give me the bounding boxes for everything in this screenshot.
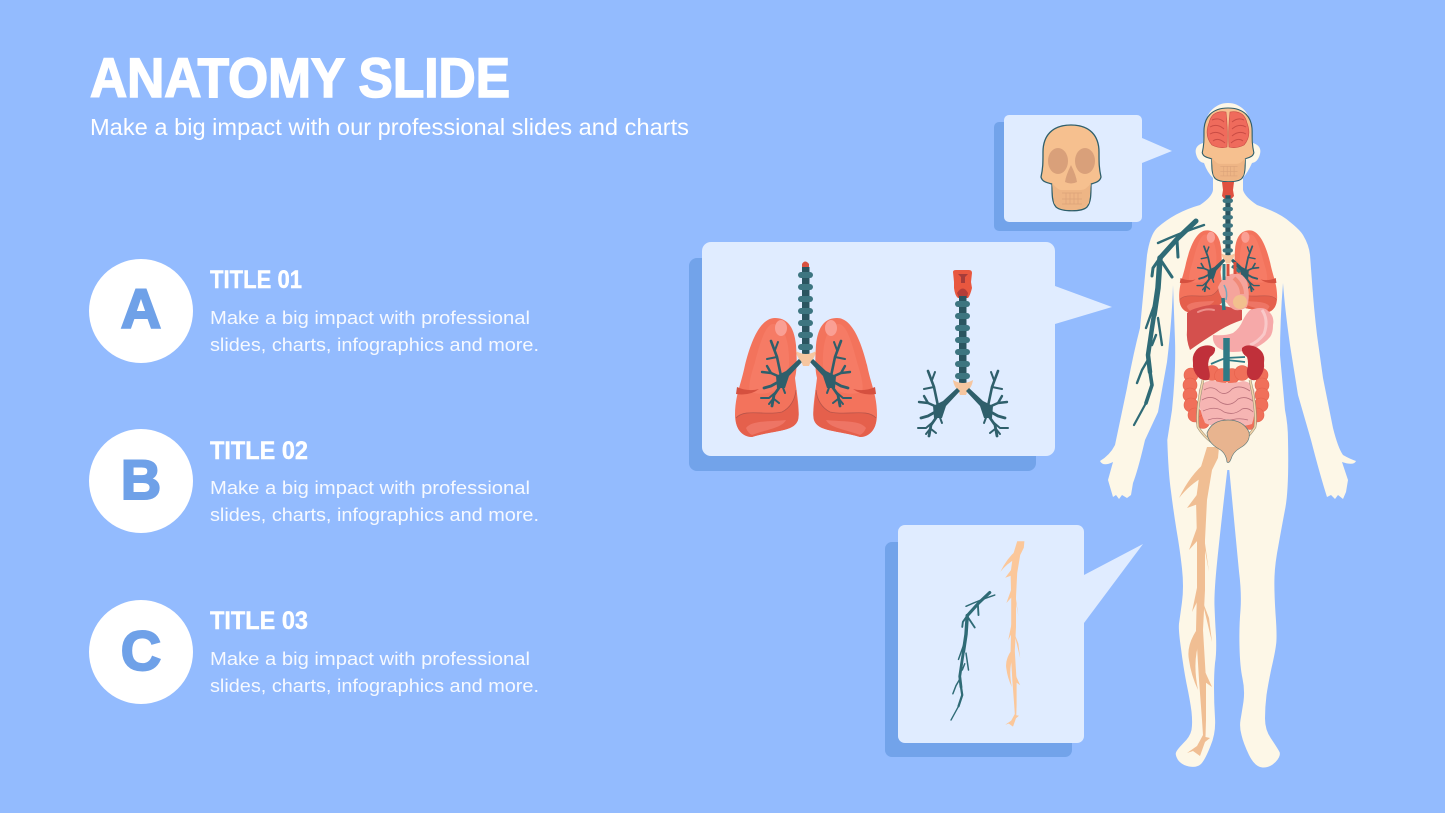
title: ANATOMY SLIDE — [90, 46, 510, 109]
description C: Make a big impact with professional — [210, 649, 530, 669]
lungs and trachea — [1179, 195, 1277, 313]
badge C: C — [121, 619, 161, 682]
icon: vein — [951, 593, 995, 720]
heading title 02: TITLE 02 — [210, 437, 308, 465]
kidneys — [1193, 345, 1264, 380]
heart — [1218, 262, 1249, 310]
icon: trachea and bronchi — [918, 270, 1008, 436]
heading title 01: TITLE 01 — [210, 266, 302, 294]
panel: vessels callout — [885, 525, 1143, 757]
panel: skull callout — [994, 115, 1172, 231]
larynx — [1222, 182, 1234, 200]
large intestine — [1183, 366, 1269, 430]
icon: nerve — [1000, 541, 1024, 727]
subtitle: Make a big impact with our professional slides and charts — [90, 114, 689, 140]
badge B — [89, 429, 193, 533]
leg nerve — [1179, 447, 1219, 756]
description C: slides, charts, infographics and more. — [210, 676, 539, 696]
item B — [89, 429, 539, 533]
description B: slides, charts, infographics and more. — [210, 505, 539, 525]
liver — [1187, 305, 1242, 350]
body skull — [1202, 108, 1254, 182]
item A — [89, 259, 539, 363]
stomach — [1213, 308, 1273, 352]
badge C — [89, 600, 193, 704]
bladder — [1207, 420, 1249, 463]
heading title 03: TITLE 03 — [210, 607, 308, 635]
body silhouette — [1100, 103, 1356, 768]
badge A — [89, 259, 193, 363]
badge B: B — [121, 448, 161, 511]
description A — [210, 308, 539, 355]
description B: Make a big impact with professional — [210, 478, 530, 498]
icon: skull — [1041, 125, 1101, 211]
badge A: A — [121, 277, 161, 340]
blood vessels and ureters — [1198, 338, 1255, 447]
description A: Make a big impact with professional — [210, 308, 530, 328]
icon: lungs with trachea — [735, 262, 877, 437]
panel: lungs callout — [689, 242, 1112, 471]
item C — [89, 600, 539, 704]
arm vein — [1134, 221, 1204, 425]
small intestine — [1199, 381, 1255, 426]
description B — [210, 478, 539, 525]
brain — [1207, 112, 1249, 148]
figure: human body — [1100, 103, 1356, 768]
description A: slides, charts, infographics and more. — [210, 335, 539, 355]
description C — [210, 649, 539, 696]
